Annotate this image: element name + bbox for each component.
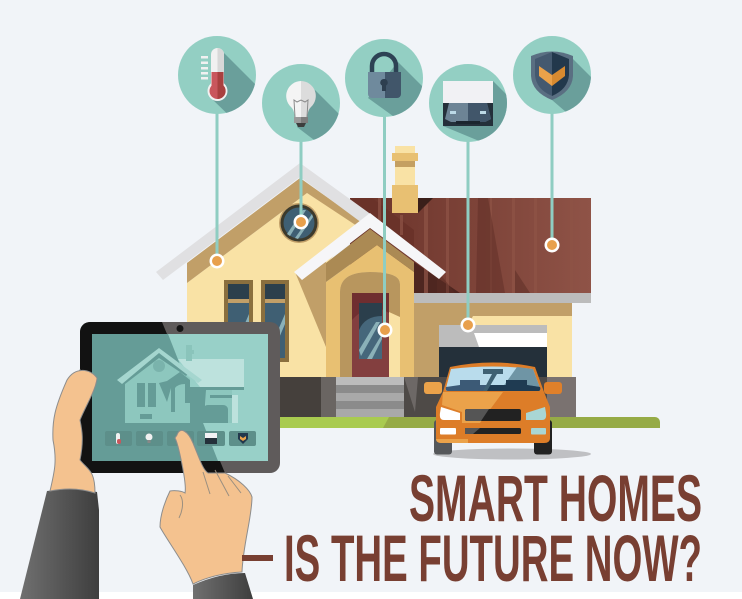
pin dot — [544, 238, 560, 252]
lower grille and fog lights — [440, 428, 546, 434]
icon: shield — [531, 52, 573, 100]
foundation — [280, 377, 576, 417]
hood highlight — [436, 392, 503, 443]
pin dot — [294, 214, 308, 230]
lawn — [280, 417, 660, 428]
chimney — [392, 146, 418, 185]
title — [242, 461, 702, 595]
right hand — [160, 430, 252, 584]
pin dot — [460, 318, 476, 332]
gable trim — [187, 178, 362, 283]
wheels — [434, 420, 552, 454]
garage wall — [414, 303, 572, 377]
mirrors — [424, 382, 562, 394]
left window 2 — [261, 280, 289, 362]
porch shadow on wall — [295, 262, 326, 347]
title dash — [242, 555, 273, 561]
windshield — [446, 366, 540, 391]
icon: padlock — [368, 54, 401, 98]
camera — [176, 325, 184, 332]
right sleeve — [193, 573, 253, 599]
gutter band — [414, 293, 591, 303]
mini icon bar — [105, 431, 256, 446]
tablet screen — [92, 334, 268, 461]
chimney base — [392, 185, 418, 213]
headlights — [440, 407, 546, 420]
left hand — [50, 370, 97, 493]
gable wall — [187, 193, 358, 377]
mini house — [117, 345, 244, 423]
tablet — [80, 322, 280, 473]
left sleeve — [20, 489, 99, 599]
house — [156, 146, 660, 428]
icon: garage — [443, 81, 493, 126]
pin dot — [378, 322, 392, 338]
icon: light bulb — [286, 81, 316, 127]
icon pin: thermometer — [178, 36, 256, 268]
left window 1 — [224, 280, 253, 362]
garage door — [439, 325, 547, 397]
car body — [436, 362, 550, 443]
icon pin: padlock — [345, 39, 423, 338]
grey gable roof — [156, 163, 376, 280]
pin dot — [210, 254, 224, 268]
round window — [279, 203, 319, 243]
icon pin: shield — [513, 36, 591, 252]
door — [352, 293, 389, 377]
icon pin: garage — [429, 64, 507, 332]
icon pin: light bulb — [262, 64, 340, 230]
car shadow — [433, 448, 591, 460]
front steps — [336, 377, 404, 417]
car — [424, 362, 591, 460]
grille — [465, 409, 521, 421]
porch roof — [294, 213, 446, 280]
icon: thermometer — [201, 48, 228, 101]
maroon main roof — [350, 198, 591, 293]
porch — [326, 229, 414, 377]
tablet and hands — [20, 322, 280, 599]
